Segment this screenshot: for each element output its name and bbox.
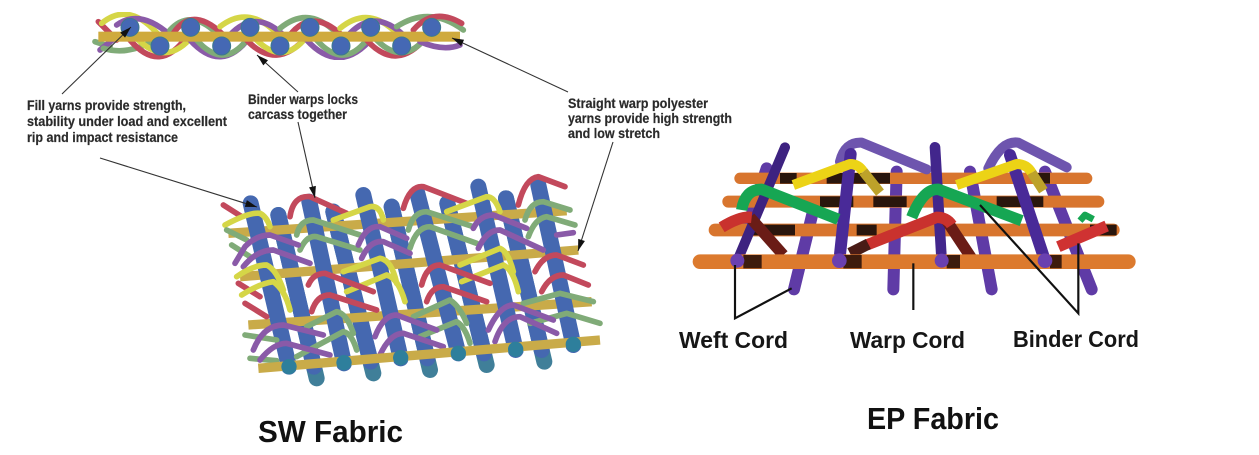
- straight warp yarns, upper: [228, 211, 592, 325]
- light purple binder: [840, 142, 1067, 169]
- back fill yarns: [278, 198, 544, 378]
- binder warps: [223, 177, 600, 361]
- diagram: EP fabric: [700, 142, 1128, 289]
- front fill yarns: [251, 185, 573, 367]
- label: binder cord: Binder Cord: [1013, 326, 1139, 352]
- back weft cords: [747, 168, 1092, 289]
- callout: straight warp: Straight warp polyester: [568, 96, 709, 111]
- cord shadows, front: [743, 242, 1062, 282]
- red binder: [722, 217, 1107, 258]
- cord shadows: [750, 178, 1117, 230]
- weft cord ends: [730, 253, 1052, 268]
- callout: straight warp: yarns provide high strength: [568, 111, 732, 126]
- callout: straight warp: [568, 96, 732, 141]
- callout: straight warp: and low stretch: [568, 126, 660, 141]
- callout: fill yarns: [27, 98, 227, 145]
- callout: binder warps: [248, 92, 358, 122]
- title: EP Fabric: EP Fabric: [867, 401, 999, 436]
- arrows: EP fabric callouts: [735, 205, 1078, 318]
- callout: binder warps: carcass together: [248, 107, 348, 122]
- callout: fill yarns: stability under load and excellent: [27, 114, 227, 129]
- label: weft cord: Weft Cord: [679, 327, 788, 353]
- warp cord, front: [700, 240, 1128, 284]
- arrows: SW fabric callouts: [62, 27, 613, 251]
- title: SW Fabric: SW Fabric: [258, 414, 403, 449]
- diagram: SW fabric woven carcass: [223, 177, 600, 378]
- callout: binder warps: Binder warps locks: [248, 92, 358, 107]
- callout: fill yarns: Fill yarns provide strength,: [27, 98, 186, 113]
- green binder: [742, 189, 1093, 221]
- straight warp yarn, front: [258, 340, 600, 368]
- warp cords, back: [715, 178, 1113, 230]
- callout: fill yarns: rip and impact resistance: [27, 130, 178, 145]
- front weft cords: [737, 147, 1045, 261]
- yellow binder: [793, 164, 1043, 193]
- fill yarn ends: [281, 337, 581, 374]
- diagram: SW fabric cross-section strand: [95, 14, 463, 58]
- label: warp cord: Warp Cord: [850, 327, 965, 353]
